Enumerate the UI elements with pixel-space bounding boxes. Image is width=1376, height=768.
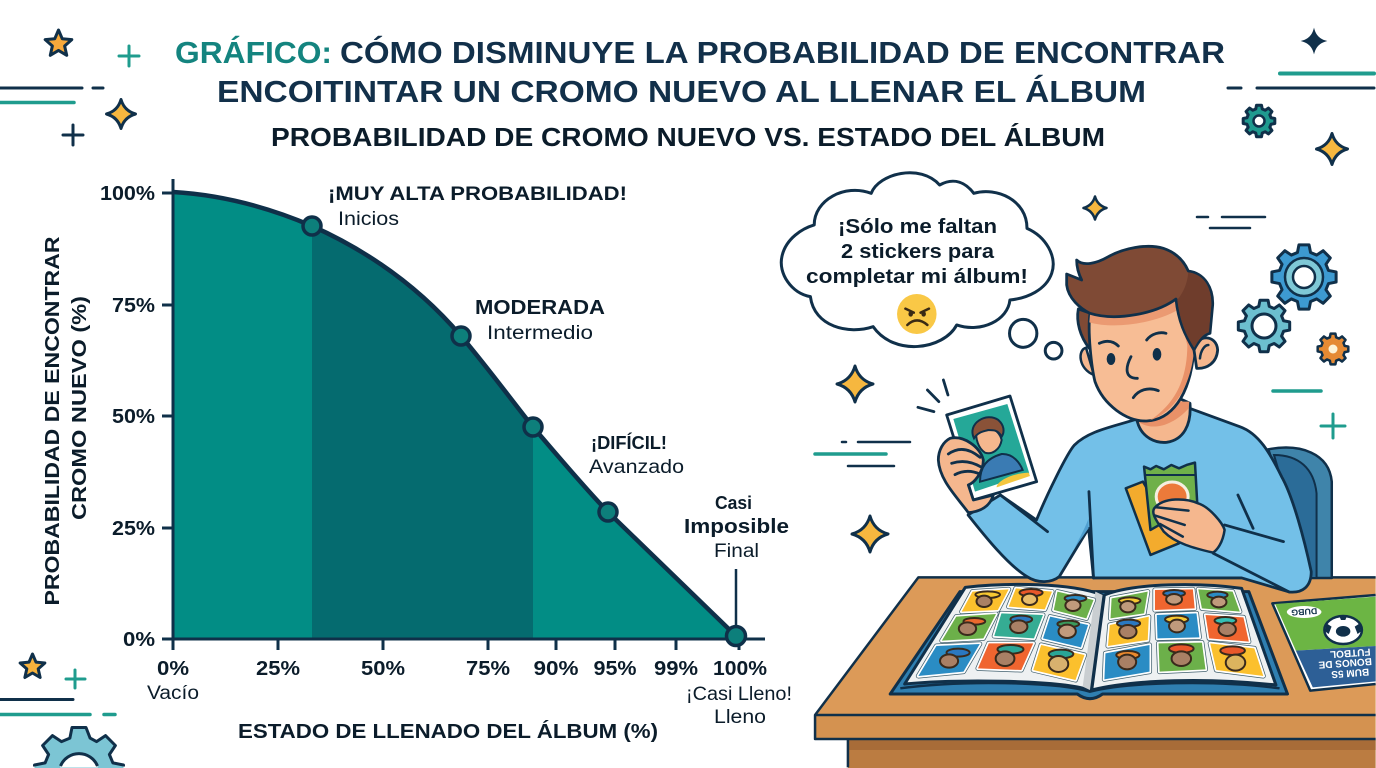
sticker pack text: DUBG — [1290, 606, 1318, 618]
bubble text: ¡Sólo me faltan — [838, 216, 997, 238]
annotation: final: Imposible — [684, 516, 789, 538]
left page — [905, 584, 1103, 690]
y axis title: PROBABILIDAD DE ENCONTRAR — [42, 236, 64, 606]
sticker pack text — [1290, 606, 1372, 679]
annotation: intermedio: MODERADA — [475, 297, 605, 319]
sticker pack text: BONOS DE — [1318, 655, 1372, 670]
x tick labels: 99% — [654, 658, 698, 680]
card — [947, 396, 1037, 500]
sticker pack text: BUM 5S — [1331, 666, 1369, 679]
icon: teal gear — [1238, 300, 1290, 352]
yellow pack — [1126, 482, 1179, 555]
annotation: inicios: ¡MUY ALTA PROBABILIDAD! — [328, 184, 627, 205]
curve area — [173, 192, 736, 638]
chair — [1268, 448, 1332, 578]
x tick labels: 100% — [713, 658, 767, 680]
decoration: top right — [1228, 30, 1374, 164]
annotation: intermedio: Intermedio — [487, 323, 593, 344]
annotation: final: Casi — [715, 492, 752, 513]
left hand — [938, 438, 993, 513]
emoji: frown — [897, 294, 937, 334]
thought bubble — [781, 173, 1062, 359]
bubble text: completar mi álbum! — [806, 266, 1028, 288]
decoration: top left — [0, 30, 139, 145]
y tick labels: 0% — [123, 629, 155, 651]
annotation: avanzado — [589, 432, 684, 478]
left ear — [1081, 348, 1094, 375]
axes — [162, 179, 765, 650]
sleeve shade — [1074, 518, 1089, 548]
sticker frames — [918, 588, 1263, 680]
icon: orange gear — [1318, 334, 1348, 364]
sweater creases — [1000, 492, 1289, 592]
hair shade — [1177, 272, 1211, 348]
annotation: avanzado: Avanzado — [589, 457, 684, 478]
sweater — [968, 408, 1311, 592]
title: GRÁFICO: — [175, 35, 332, 70]
stickers — [918, 588, 1263, 680]
right hand — [1153, 499, 1225, 553]
x tick labels: 0% — [157, 658, 189, 680]
album — [890, 584, 1288, 699]
back hair — [1078, 309, 1095, 348]
green pack — [1144, 463, 1197, 530]
y tick labels — [100, 183, 155, 651]
x sub labels: Lleno — [714, 707, 766, 728]
y tick labels: 100% — [100, 183, 155, 205]
face — [1089, 299, 1194, 421]
dark middle band — [312, 226, 533, 638]
annotation: intermedio — [475, 297, 605, 344]
held sticker and hand — [938, 396, 1037, 513]
right page — [1092, 585, 1276, 690]
x tick labels — [157, 658, 767, 680]
x sub labels — [147, 683, 792, 728]
sticker pack on table — [1272, 595, 1376, 691]
neck — [1137, 385, 1190, 442]
annotation: avanzado: ¡DIFÍCIL! — [591, 432, 667, 453]
icon: cropped gear — [34, 728, 124, 768]
hair — [1067, 246, 1213, 350]
x axis title: ESTADO DE LLENADO DEL ÁLBUM (%) — [238, 720, 658, 743]
annotation: inicios — [328, 184, 627, 230]
title: CÓMO DISMINUYE LA PROBABILIDAD DE ENCONTRAR — [340, 34, 1225, 70]
title: ENCOITINTAR UN CROMO NUEVO AL LLENAR EL ÁLBUM — [217, 74, 1146, 109]
decoration: bottom left — [0, 654, 124, 768]
head — [1067, 246, 1218, 442]
burst lines — [918, 380, 948, 412]
y tick labels: 75% — [112, 295, 155, 317]
sticker pack text: FUTBOL — [1330, 646, 1371, 659]
x tick labels: 90% — [534, 658, 579, 680]
x tick labels: 95% — [594, 658, 637, 680]
title — [175, 34, 1225, 109]
y axis title: CROMO NUEVO (%) — [69, 296, 91, 520]
data points — [303, 217, 746, 646]
face shadow — [1150, 310, 1194, 420]
annotation: final — [684, 492, 789, 628]
x tick labels: 75% — [466, 658, 510, 680]
icon: blue gear — [1272, 245, 1336, 309]
brows, nose, mouth — [1099, 333, 1166, 398]
table — [815, 577, 1376, 768]
subtitle: PROBABILIDAD DE CROMO NUEVO VS. ESTADO DEL ÁLBUM — [271, 122, 1105, 152]
chart: probability curve — [42, 179, 792, 743]
bubble text: 2 stickers para — [841, 241, 995, 263]
x tick labels: 25% — [256, 658, 300, 680]
y axis title — [42, 236, 91, 606]
bubble text — [806, 216, 1028, 288]
y tick labels: 50% — [112, 406, 155, 428]
y tick labels: 25% — [112, 518, 155, 540]
decoration: right side icons — [815, 196, 1348, 552]
sticker portraits — [940, 589, 1245, 672]
x sub labels: ¡Casi Lleno! — [686, 684, 792, 705]
eyes — [1107, 353, 1115, 365]
pack emblem — [1156, 482, 1188, 511]
right ear — [1194, 338, 1218, 368]
x sub labels: Vacío — [147, 683, 199, 704]
curve line — [173, 192, 736, 636]
annotation: final: Final — [714, 541, 759, 562]
person — [918, 380, 1332, 592]
x tick labels: 50% — [361, 658, 405, 680]
annotation: inicios: Inicios — [338, 209, 399, 230]
